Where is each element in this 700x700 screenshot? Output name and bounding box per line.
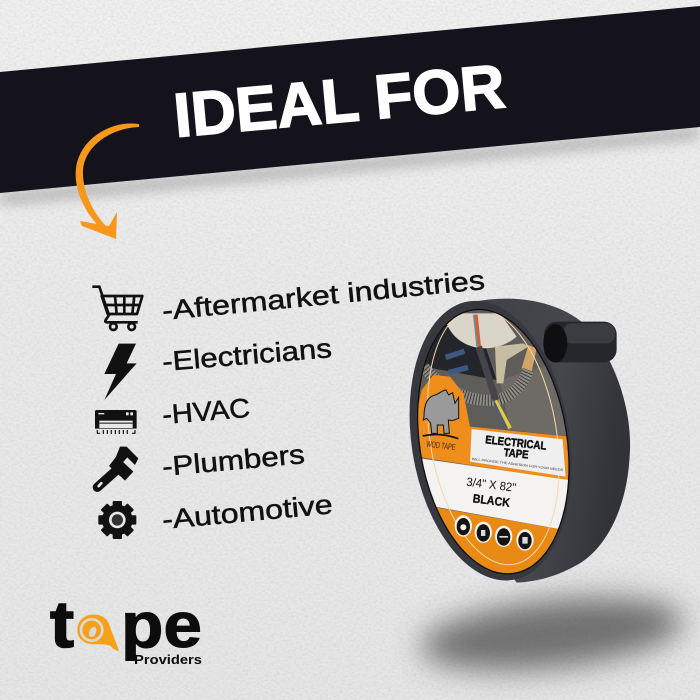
label outline xyxy=(399,298,588,586)
product title line 1: ELECTRICAL xyxy=(485,434,547,453)
logo subtitle: Providers xyxy=(134,653,202,667)
list item: HVAC: -HVAC xyxy=(161,393,251,430)
photo: cream hoses xyxy=(447,313,517,348)
white size band xyxy=(422,458,568,529)
brand name: WOD TAPE xyxy=(426,439,456,452)
orange base band xyxy=(436,508,558,574)
photo: taped wires xyxy=(475,315,479,347)
rhino logo xyxy=(423,390,459,439)
tape front rim xyxy=(391,289,591,592)
icon: shopping cart xyxy=(92,287,142,330)
tape tab xyxy=(543,322,617,363)
tape shadow xyxy=(417,586,687,682)
orange label band xyxy=(417,375,570,481)
list item: automotive: -Automotive xyxy=(161,489,334,535)
icon: pipe wrench xyxy=(97,447,138,488)
icon: lightning bolt xyxy=(104,344,137,400)
size text: 3/4" X 82" xyxy=(466,475,517,495)
tape roll xyxy=(410,298,630,583)
photo: dark engine area xyxy=(423,320,497,380)
arrow xyxy=(76,123,139,239)
white title panel xyxy=(470,429,566,477)
list item: plumbers: -Plumbers xyxy=(161,439,306,482)
logo letter t: t xyxy=(50,587,74,661)
product label xyxy=(418,310,568,574)
photo: concrete xyxy=(501,366,566,436)
list item: electricians: -Electricians xyxy=(161,333,333,377)
list item: aftermarket industries: -Aftermarket industries xyxy=(161,265,486,326)
banner shadow xyxy=(0,127,700,205)
icon list xyxy=(92,265,486,539)
logo letters pe: pe xyxy=(121,589,202,661)
product title line 2: TAPE xyxy=(503,447,529,462)
colour text: BLACK xyxy=(472,491,511,510)
product badges xyxy=(455,515,534,551)
product tagline: WILL PROVIDE THE ADHESION FOR YOUR NEEDS xyxy=(472,457,564,472)
brand logo xyxy=(50,587,202,667)
tape body xyxy=(467,299,630,583)
icon: air conditioner xyxy=(95,410,137,434)
banner xyxy=(0,6,700,193)
logo tape mark xyxy=(77,615,119,652)
title: IDEAL FOR xyxy=(171,52,508,151)
white arc xyxy=(427,312,560,566)
photo: corrugated conduit xyxy=(423,367,528,400)
icon: gear xyxy=(98,501,136,539)
